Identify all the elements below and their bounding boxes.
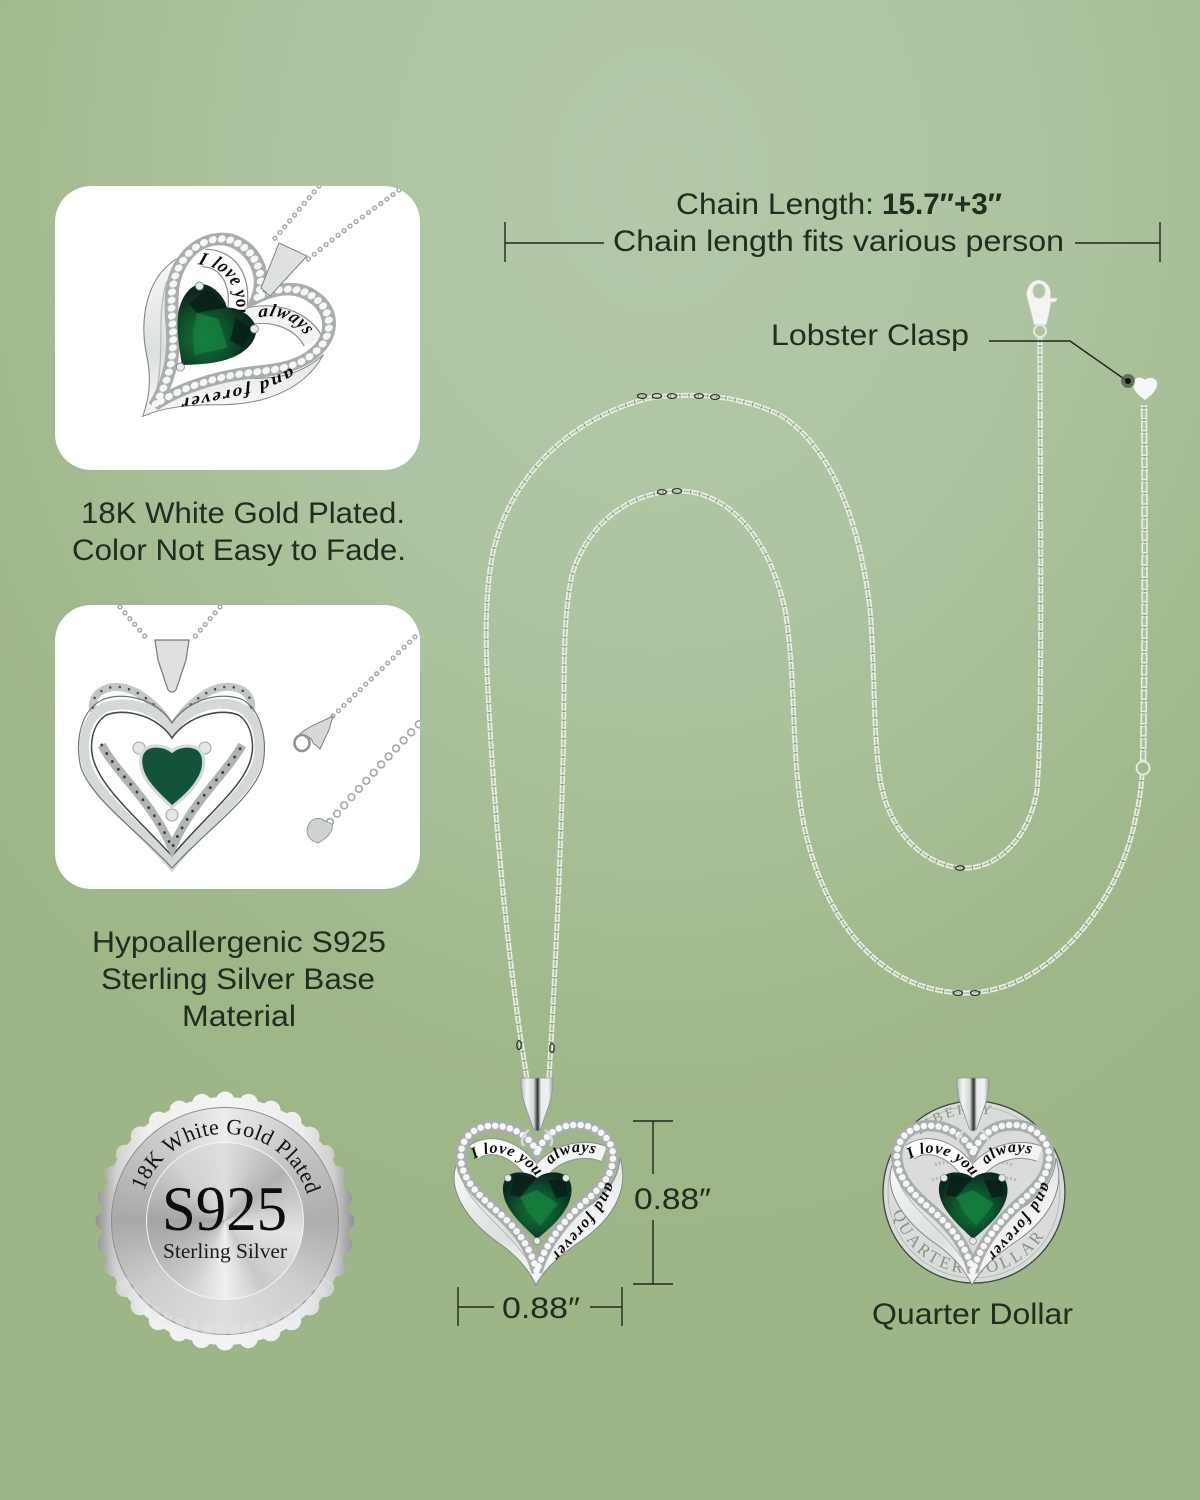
lobster clasp callout: Lobster Clasp (771, 319, 969, 352)
panel 1 chain (271, 186, 399, 262)
caption: base material (92, 926, 386, 1033)
panel 2 bail (155, 640, 189, 692)
panel 2 extender chain and tag (307, 723, 420, 843)
chain length bracket (505, 222, 1160, 262)
pendant with dimensions: I love you (470, 1142, 542, 1176)
panel: back of pendant and clasp (55, 605, 420, 889)
chain length heading: 15.7″+3″ (882, 188, 1002, 221)
quarter dollar caption: Quarter Dollar (872, 1298, 1073, 1331)
panel 1 bail (261, 243, 307, 296)
panel 2 chain to pendant (120, 607, 220, 640)
height dimension (633, 1121, 711, 1284)
chain length heading: Chain length fits various person (613, 225, 1064, 258)
width dimension (458, 1287, 622, 1326)
medallion sterling silver: Sterling Silver (163, 1239, 287, 1263)
caption: plating: 18K White Gold Plated. (81, 497, 405, 530)
pendant with dimensions: and forever (554, 1182, 612, 1260)
width dimension: 0.88″ (502, 1292, 580, 1325)
pendant on quarter dollar: and forever (990, 1182, 1048, 1260)
pendant with dimensions (454, 1078, 624, 1286)
panel 1 stone (176, 282, 259, 372)
medallion ring text: 18K White Gold Plated (132, 1120, 322, 1194)
pendant with dimensions: always (548, 1144, 596, 1164)
lobster clasp (1027, 280, 1057, 337)
panel 1 pendant: I love you (198, 253, 246, 312)
panel 1 pendant: always (258, 304, 312, 334)
panel 2 upper chain and clasp (294, 632, 420, 751)
pendant on quarter dollar: QUARTER DOLLAR (894, 1210, 1044, 1274)
caption: base material: Sterling Silver Base (101, 963, 375, 996)
pendant on quarter dollar: always (984, 1144, 1032, 1164)
infographic canvas (55, 186, 1161, 1350)
panel 2 heart back (78, 687, 264, 868)
pendant on quarter dollar: I love you (906, 1142, 978, 1176)
chain length heading (613, 188, 1064, 258)
medallion S925: S925 (162, 1174, 287, 1244)
caption: plating (72, 497, 406, 567)
panel: white gold plated close-up (55, 186, 420, 470)
extender heart tag (1133, 378, 1157, 400)
panel 1 pendant (142, 232, 336, 418)
lobster clasp callout (771, 319, 1135, 388)
pendant on quarter dollar: LIBERTY (920, 1104, 992, 1134)
pendant on quarter dollar (882, 1078, 1066, 1286)
silver medallion (96, 1092, 354, 1350)
chain length heading: Chain Length: (676, 188, 874, 221)
caption: base material: Material (182, 1000, 296, 1033)
panel 2 stone (133, 742, 211, 821)
main chain (486, 338, 1150, 1078)
panel 1 pendant: and forever (182, 368, 293, 407)
height dimension: 0.88″ (634, 1183, 711, 1216)
caption: plating: Color Not Easy to Fade. (72, 534, 406, 567)
caption: base material: Hypoallergenic S925 (92, 926, 386, 959)
